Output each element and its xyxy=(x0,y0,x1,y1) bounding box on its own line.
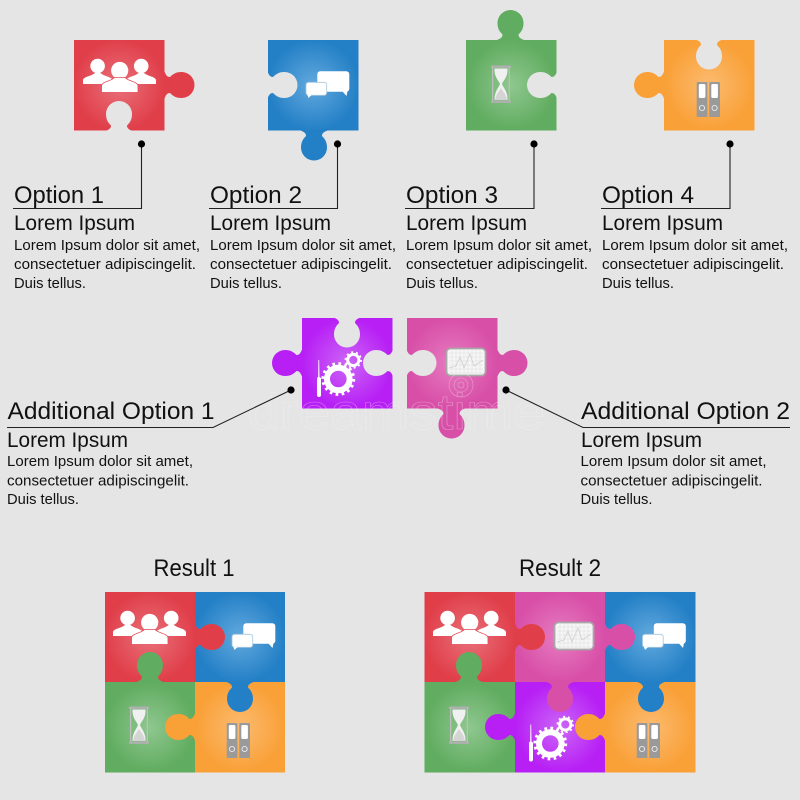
icon: binders xyxy=(697,82,720,117)
icon: chat bubbles xyxy=(642,623,686,650)
body text: consectetuer adipiscingelit. xyxy=(14,257,196,273)
tab: red into blue xyxy=(194,624,225,650)
tile: red xyxy=(424,592,515,682)
tab: red right xyxy=(164,72,194,98)
icon: binders xyxy=(637,723,660,758)
puzzle: result 1 xyxy=(105,592,285,772)
leader line xyxy=(7,390,291,428)
tile: blue xyxy=(605,592,696,682)
heading: Option 4 xyxy=(602,182,694,209)
body text xyxy=(210,238,396,292)
icon: people xyxy=(433,611,506,644)
tile: purple xyxy=(515,682,605,772)
puzzle piece: pink monitor xyxy=(406,318,528,438)
body text: consectetuer adipiscingelit. xyxy=(602,257,784,273)
heading: Option 2 xyxy=(210,182,302,209)
puzzle piece: orange binders xyxy=(634,39,754,130)
body text: Duis tellus. xyxy=(602,276,674,292)
subheading: Lorem Ipsum xyxy=(406,212,527,235)
body text: Lorem Ipsum dolor sit amet, xyxy=(7,454,193,470)
tab: red into pink xyxy=(514,624,545,650)
subheading: Lorem Ipsum xyxy=(7,429,128,452)
heading: result 1: Result 1 xyxy=(154,555,234,582)
tile: red xyxy=(105,592,195,682)
body text: consectetuer adipiscingelit. xyxy=(580,474,762,490)
icon: chart monitor xyxy=(554,622,594,650)
leader line xyxy=(13,144,142,208)
puzzle piece: purple gears xyxy=(272,317,394,408)
callout: additional option 2 xyxy=(502,386,790,508)
body text xyxy=(7,454,193,508)
tab: blue bottom xyxy=(300,130,328,160)
body text: Duis tellus. xyxy=(210,276,282,292)
puzzle piece: red people xyxy=(74,40,194,132)
notch: pink left xyxy=(406,350,436,376)
tab: pink into purple xyxy=(546,681,574,712)
tab: pink into blue xyxy=(604,624,635,650)
icon: chat bubbles xyxy=(232,623,275,650)
notch: green right xyxy=(527,72,558,98)
body text: Duis tellus. xyxy=(7,492,79,508)
tab: purple left xyxy=(272,350,303,376)
icon: gears and screwdriver xyxy=(529,717,573,762)
heading: Option 1 xyxy=(14,182,104,209)
tab: purple into green xyxy=(485,714,516,740)
leader dot xyxy=(287,386,295,394)
callout: option 3 xyxy=(405,140,592,292)
heading: result 2: Result 2 xyxy=(519,555,601,582)
subheading: Lorem Ipsum xyxy=(210,212,331,235)
notch: red bottom xyxy=(106,101,132,132)
heading: Option 3 xyxy=(406,182,498,209)
tab: orange left xyxy=(634,72,665,98)
callout: option 2 xyxy=(209,140,396,292)
puzzle: result 2 xyxy=(424,592,696,772)
notch: purple top xyxy=(334,317,360,348)
body text: Lorem Ipsum dolor sit amet, xyxy=(602,238,788,254)
subheading: Lorem Ipsum xyxy=(581,429,702,452)
leader dot xyxy=(502,386,510,394)
notch: orange top xyxy=(696,39,722,70)
body text: Duis tellus. xyxy=(406,276,478,292)
tab: green top xyxy=(497,10,524,41)
body text: consectetuer adipiscingelit. xyxy=(210,257,392,273)
leader dot xyxy=(334,140,341,148)
tab: orange into purple xyxy=(575,714,606,740)
icon: hourglass xyxy=(129,706,149,744)
body text: consectetuer adipiscingelit. xyxy=(406,257,588,273)
leader line xyxy=(601,144,730,208)
subheading: Lorem Ipsum xyxy=(14,212,135,235)
body text: Duis tellus. xyxy=(14,276,86,292)
tab: orange into green xyxy=(165,714,196,740)
icon: chart monitor xyxy=(446,348,486,376)
icon: binders xyxy=(227,723,250,758)
body text xyxy=(406,238,592,292)
tab: blue into orange xyxy=(638,681,664,712)
heading: Additional Option 2 xyxy=(581,398,790,425)
body text xyxy=(602,238,788,292)
body text xyxy=(580,454,766,508)
tab: green into red xyxy=(136,652,164,683)
tile: green xyxy=(105,682,195,772)
heading: Additional Option 1 xyxy=(8,398,214,425)
leader line xyxy=(506,390,790,428)
tile: pink xyxy=(515,592,605,682)
tab: pink bottom xyxy=(438,408,465,438)
subheading: Lorem Ipsum xyxy=(602,212,723,235)
body text: Lorem Ipsum dolor sit amet, xyxy=(580,454,766,470)
leader dot xyxy=(138,140,145,148)
puzzle piece: green hourglass xyxy=(466,10,558,130)
icon: chat bubbles xyxy=(306,71,349,98)
watermark: dreamstime xyxy=(248,384,545,440)
tab: green into red xyxy=(456,652,482,683)
callout: option 1 xyxy=(13,140,200,292)
body text: consectetuer adipiscingelit. xyxy=(7,474,189,490)
callout: additional option 1 xyxy=(7,386,295,508)
body text: Duis tellus. xyxy=(580,492,652,508)
tile: blue xyxy=(195,592,285,682)
body text: Lorem Ipsum dolor sit amet, xyxy=(210,238,396,254)
tile: orange xyxy=(605,682,696,772)
body text: Lorem Ipsum dolor sit amet, xyxy=(14,238,200,254)
leader dot xyxy=(530,140,538,148)
icon: people xyxy=(113,611,186,644)
leader line xyxy=(209,144,338,208)
body text: Lorem Ipsum dolor sit amet, xyxy=(406,238,592,254)
tile: green xyxy=(424,682,515,772)
icon: hourglass xyxy=(491,66,511,103)
puzzle piece: blue chat xyxy=(267,40,358,160)
tab: blue into orange xyxy=(226,681,254,712)
tab: pink right xyxy=(497,350,528,376)
callout: option 4 xyxy=(601,140,788,292)
icon: people xyxy=(83,59,156,92)
leader dot xyxy=(726,140,734,148)
notch: purple right xyxy=(363,350,394,376)
tile: orange xyxy=(195,682,285,772)
body text xyxy=(14,238,200,292)
icon: gears and screwdriver xyxy=(317,352,361,397)
notch: blue left xyxy=(267,72,298,98)
icon: hourglass xyxy=(449,706,469,744)
leader line xyxy=(405,144,534,208)
